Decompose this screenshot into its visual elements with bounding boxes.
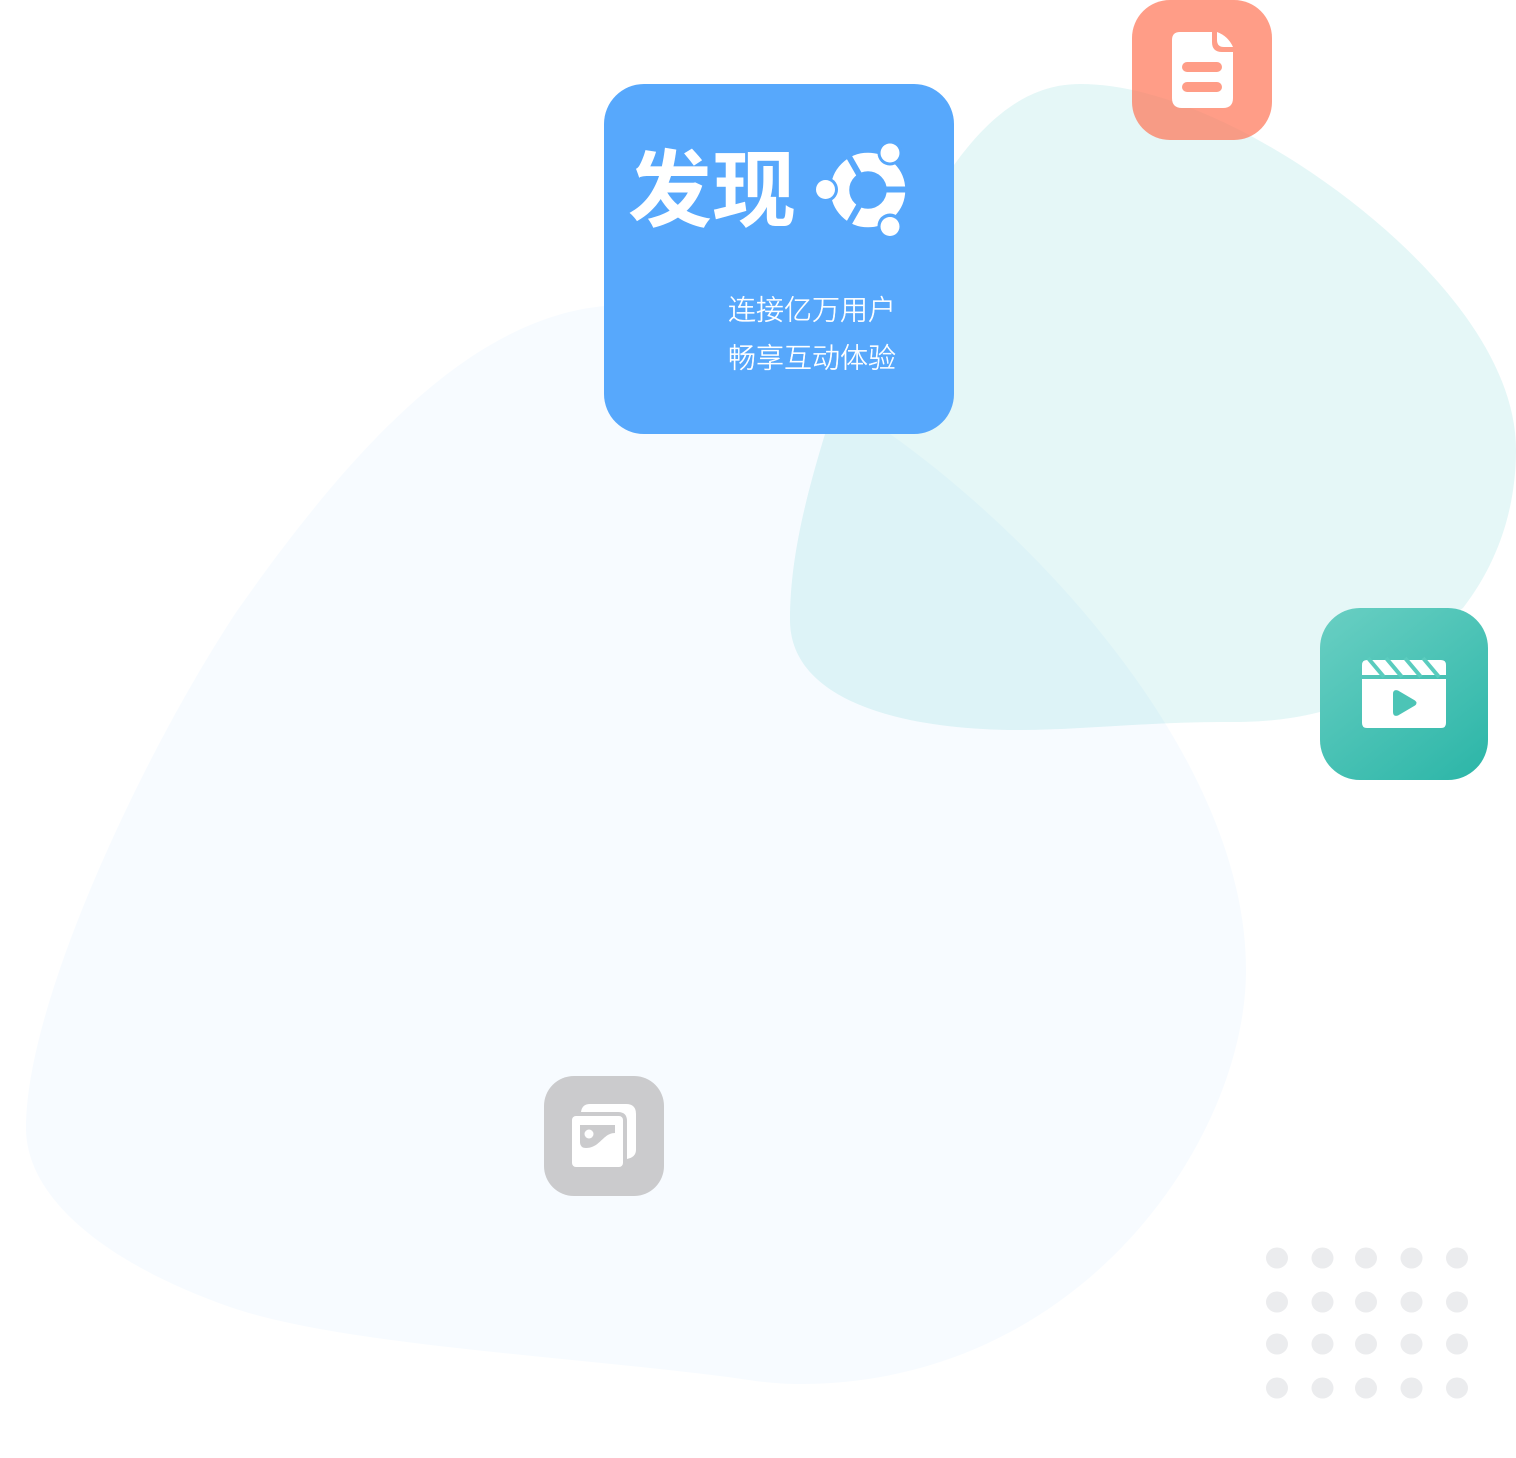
main card: discover (604, 84, 954, 434)
icon: image gallery (544, 1076, 664, 1196)
card text (728, 294, 896, 374)
icon: video clapper (1320, 608, 1488, 780)
icon: ubuntu-style logo (813, 140, 912, 238)
card heading: 发现 (628, 144, 796, 238)
icon: document (1132, 0, 1272, 140)
card text: 连接亿万用户 (728, 294, 896, 326)
card text: 畅享互动体验 (728, 342, 896, 374)
dot grid (1266, 1248, 1468, 1398)
background blob: light blue (26, 306, 1246, 1384)
background blob: light teal (790, 84, 1516, 730)
